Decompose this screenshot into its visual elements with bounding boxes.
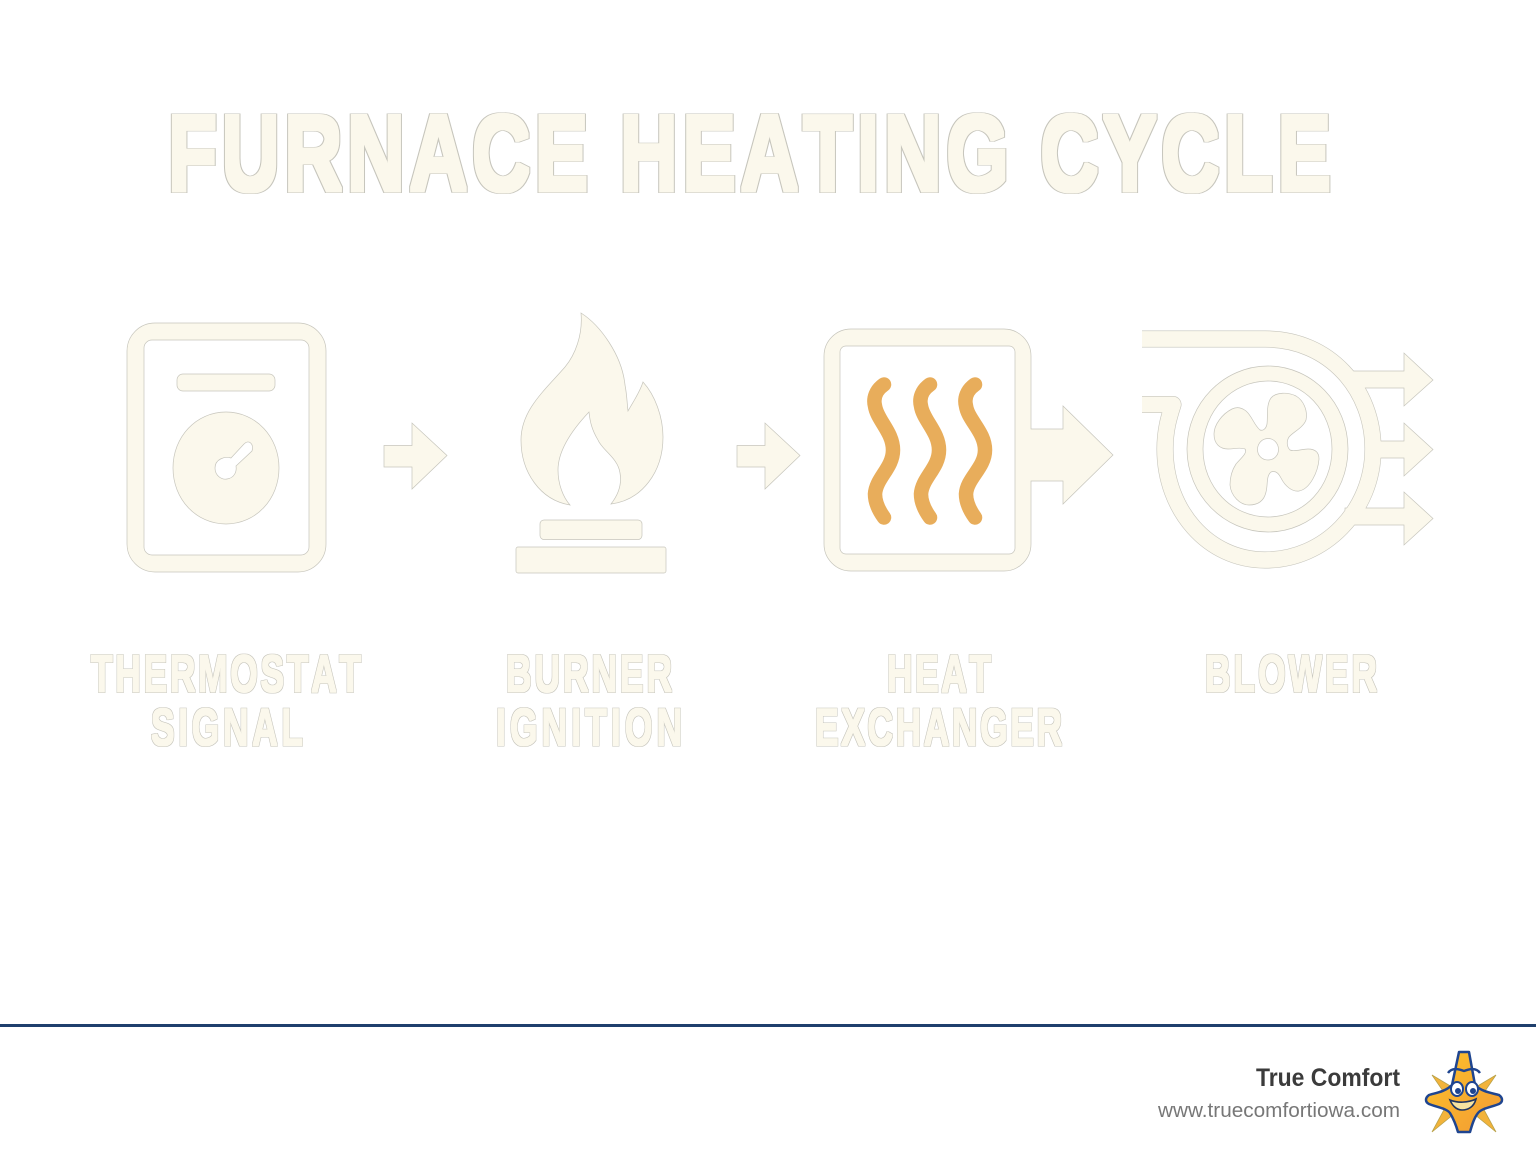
blower fan blades [1214,393,1319,505]
blower housing outline [1142,339,1373,560]
back spikes [1432,1075,1496,1132]
heat waves [874,384,985,518]
footer website: www.truecomfortiowa.com [1157,1099,1400,1122]
label: heat exchanger: HEAT [887,646,991,703]
label: burner ignition [496,646,682,757]
smile [1450,1099,1476,1110]
blower outlet arrows [1340,353,1433,545]
label: thermostat signal: THERMOSTAT [91,646,361,703]
hat brim [1448,1069,1480,1073]
label: burner ignition: IGNITION [496,699,682,757]
label: thermostat signal: SIGNAL [151,699,303,757]
label: burner ignition: BURNER [506,646,672,703]
icon: blower [1142,339,1433,560]
icon: star mascot logo [1426,1052,1502,1132]
label: heat exchanger [815,646,1062,757]
label: thermostat signal [91,646,361,757]
blower fan ring [1187,366,1348,532]
icon: burner flame [516,313,666,573]
eyes [1451,1082,1478,1096]
blower housing spiral [1142,339,1373,560]
footer brand name: True Comfort [1256,1064,1401,1092]
arrow: burner to heat exchanger [737,423,800,489]
arrow: thermostat to burner [384,423,447,489]
label: heat exchanger: EXCHANGER [815,699,1062,757]
title: FURNACE HEATING CYCLE [168,94,1331,214]
star body [1426,1052,1502,1132]
footer rule [0,1024,1536,1027]
pupils [1455,1088,1476,1094]
label: blower: BLOWER [1205,646,1377,703]
icon: heat exchanger [824,329,1113,571]
icon: thermostat [127,323,326,572]
